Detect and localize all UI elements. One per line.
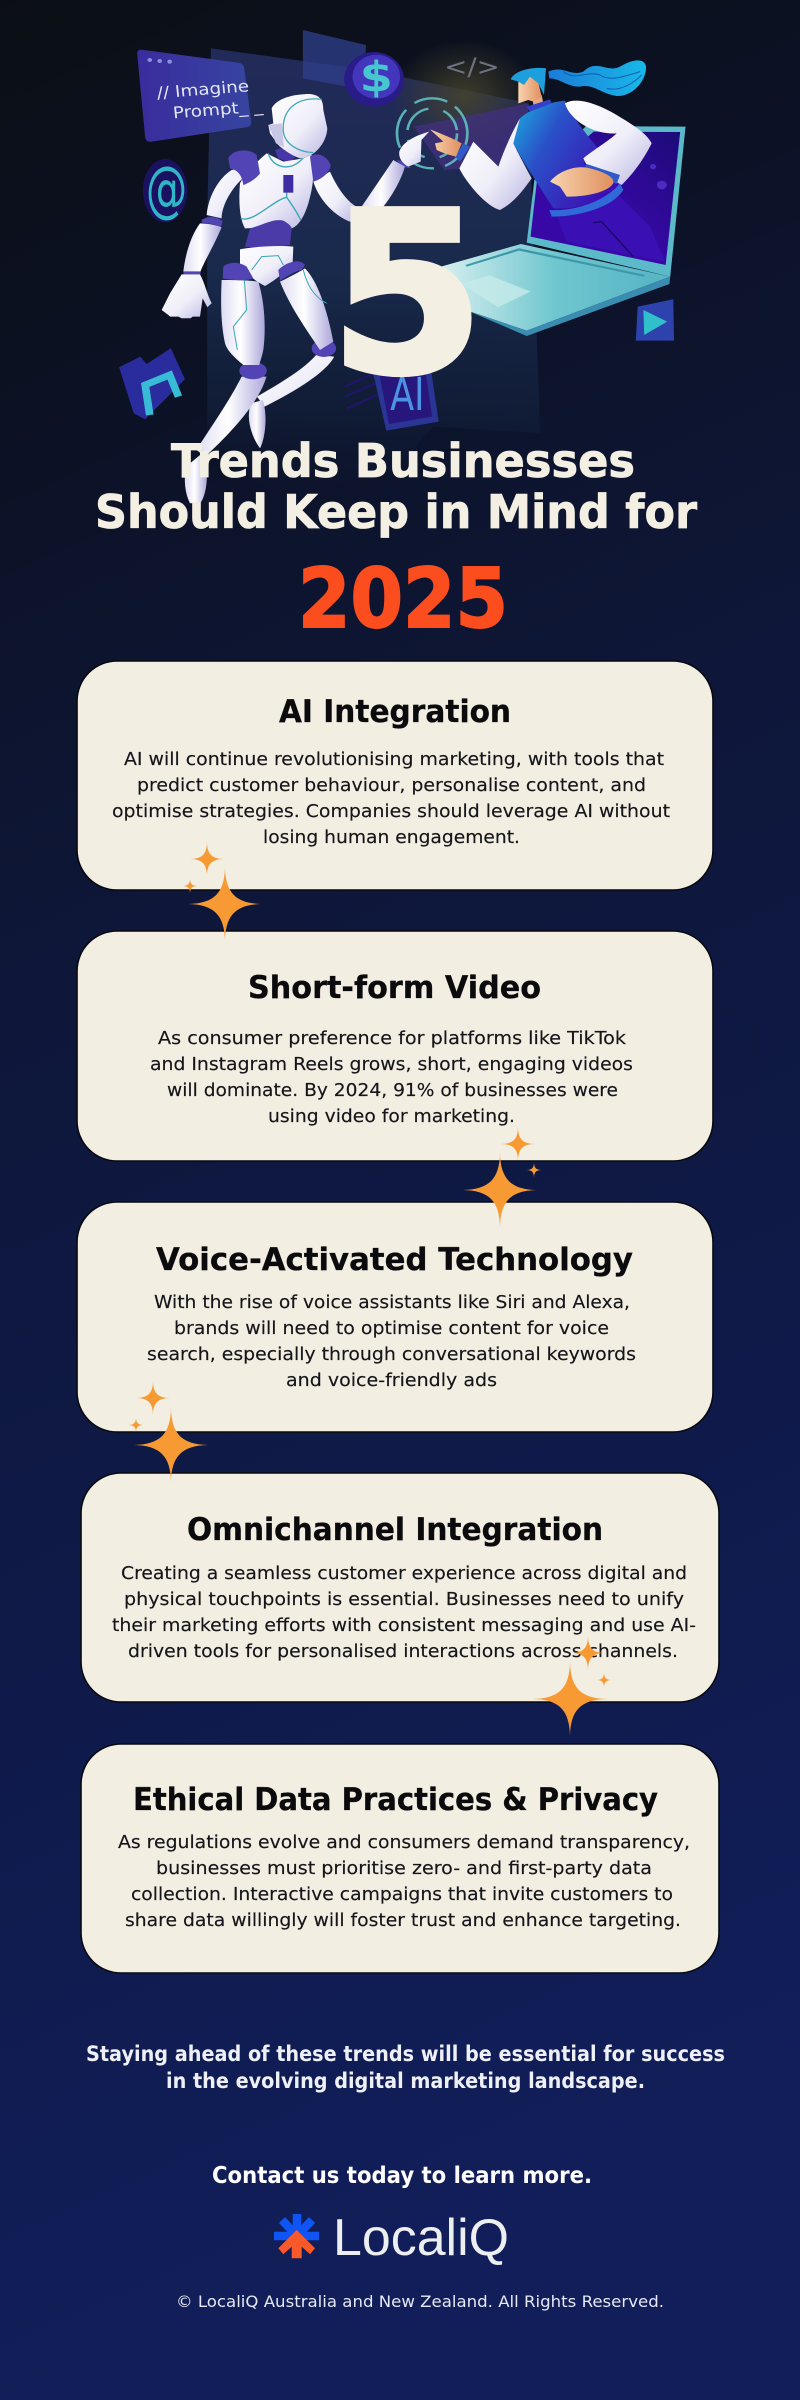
woman figure <box>430 60 665 262</box>
right cuff <box>585 164 620 184</box>
body text <box>118 1833 690 1931</box>
waist ribbing <box>549 183 623 217</box>
sparkles: card two <box>463 1127 541 1227</box>
icon: folder <box>119 348 185 419</box>
icon: at sign <box>143 152 187 225</box>
panel: Omnichannel Integration <box>81 1473 719 1702</box>
heading: AI Integration <box>279 694 511 730</box>
forearm <box>183 223 222 273</box>
body text: optimise strategies. Companies should leverage AI without <box>112 802 670 822</box>
back leg <box>249 340 336 448</box>
head <box>511 68 552 112</box>
hand <box>162 274 212 318</box>
prompt window: Prompt_ _ <box>172 98 264 123</box>
body text: collection. Interactive campaigns that invite customers to <box>131 1885 673 1905</box>
closing statement: Staying ahead of these trends will be essential for success <box>86 2042 725 2066</box>
upper arm right <box>313 172 357 223</box>
heading: Short-form Video <box>248 970 541 1006</box>
target rings <box>397 98 467 168</box>
body text: losing human engagement. <box>263 828 520 848</box>
body text: predict customer behaviour, personalise content, and <box>137 776 646 796</box>
icon: AI chip <box>345 369 439 431</box>
neck <box>275 147 297 163</box>
icon: code tag: </> <box>444 54 500 81</box>
body text <box>112 1564 696 1662</box>
waist <box>245 220 292 247</box>
icon: dollar coin: $ <box>360 53 393 102</box>
front lower leg <box>185 362 267 503</box>
body text: and voice-friendly ads <box>286 1371 497 1391</box>
ponytail <box>548 60 646 96</box>
title <box>95 434 697 539</box>
sparkles: card four <box>533 1636 611 1736</box>
resting hand <box>550 167 613 197</box>
title: Trends Businesses <box>171 434 635 488</box>
body text: Creating a seamless customer experience across digital and <box>121 1564 687 1584</box>
heading: Omnichannel Integration <box>187 1512 603 1548</box>
icon: dollar coin <box>344 52 404 107</box>
body text <box>112 750 670 848</box>
sparkles: card one <box>183 842 262 941</box>
pointing hand <box>430 129 462 157</box>
head <box>268 94 327 158</box>
prompt window: // Imagine <box>156 77 250 103</box>
body text: share data willingly will foster trust and enhance targeting. <box>125 1911 681 1931</box>
body text: and Instagram Reels grows, short, engaging videos <box>150 1055 633 1075</box>
body text: As consumer preference for platforms like TikTok <box>158 1029 627 1049</box>
panel: Short-form Video <box>77 931 713 1161</box>
torso <box>239 153 313 228</box>
year 2025: 2025 <box>298 552 508 647</box>
body text: will dominate. By 2024, 91% of businesses were <box>167 1081 618 1101</box>
pelvis <box>240 246 293 286</box>
trousers <box>557 197 665 262</box>
prompt window <box>137 50 264 142</box>
laptop <box>439 126 686 336</box>
panel: Voice-Activated Technology <box>77 1202 713 1432</box>
heading: Ethical Data Practices & Privacy <box>133 1782 658 1818</box>
left arm <box>459 118 532 210</box>
panel: Ethical Data Practices & Privacy <box>81 1744 719 1973</box>
panel: AI Integration <box>77 661 713 890</box>
body text <box>150 1029 633 1127</box>
hip joint right <box>278 261 305 281</box>
hip joint left <box>223 263 253 280</box>
robot upper body <box>162 94 405 365</box>
right arm <box>565 101 652 185</box>
icon: play button <box>636 299 674 341</box>
body text: AI will continue revolutionising marketing, with tools that <box>124 750 664 770</box>
left shoulder <box>228 150 260 185</box>
body text: businesses must prioritise zero- and first-party data <box>156 1859 652 1879</box>
vest <box>513 101 620 208</box>
left cuff <box>455 143 470 162</box>
copyright: © LocaliQ Australia and New Zealand. All Rights Reserved. <box>176 2292 664 2311</box>
thigh right <box>280 268 333 350</box>
body text: search, especially through conversational keywords <box>147 1345 636 1365</box>
wrist <box>183 271 201 274</box>
robot legs and raised arm <box>185 132 429 503</box>
light beam <box>207 30 540 500</box>
body text: With the rise of voice assistants like Siri and Alexa, <box>154 1293 630 1313</box>
icon: at sign: @ <box>146 152 187 225</box>
closing statement <box>86 2042 725 2093</box>
icon: LocaliQ mark <box>274 2214 319 2258</box>
body text: using video for marketing. <box>268 1107 515 1127</box>
body text: brands will need to optimise content for voice <box>174 1319 609 1339</box>
title: Should Keep in Mind for <box>95 485 697 539</box>
icon: AI chip: AI <box>390 369 425 421</box>
body text: As regulations evolve and consumers demand transparency, <box>118 1833 690 1853</box>
hero illustration <box>119 30 686 503</box>
elbow <box>202 217 223 227</box>
thigh left <box>221 280 265 365</box>
right shoulder <box>310 154 331 182</box>
body text: physical touchpoints is essential. Businesses need to unify <box>124 1590 684 1610</box>
wordmark: LocaliQ <box>333 2209 509 2267</box>
contact call to action: Contact us today to learn more. <box>212 2163 592 2189</box>
raised hand <box>397 132 429 168</box>
closing statement: in the evolving digital marketing landscape. <box>166 2069 645 2093</box>
body text: their marketing efforts with consistent messaging and use AI- <box>112 1616 696 1636</box>
body text <box>147 1293 636 1391</box>
raised forearm <box>362 160 405 207</box>
body text: driven tools for personalised interactions across channels. <box>128 1642 678 1662</box>
big number five: 5 <box>330 166 484 424</box>
heading: Voice-Activated Technology <box>156 1242 633 1278</box>
LocaliQ logo <box>274 2209 509 2267</box>
sparkles: card three <box>129 1381 208 1482</box>
upper arm left <box>207 170 243 218</box>
